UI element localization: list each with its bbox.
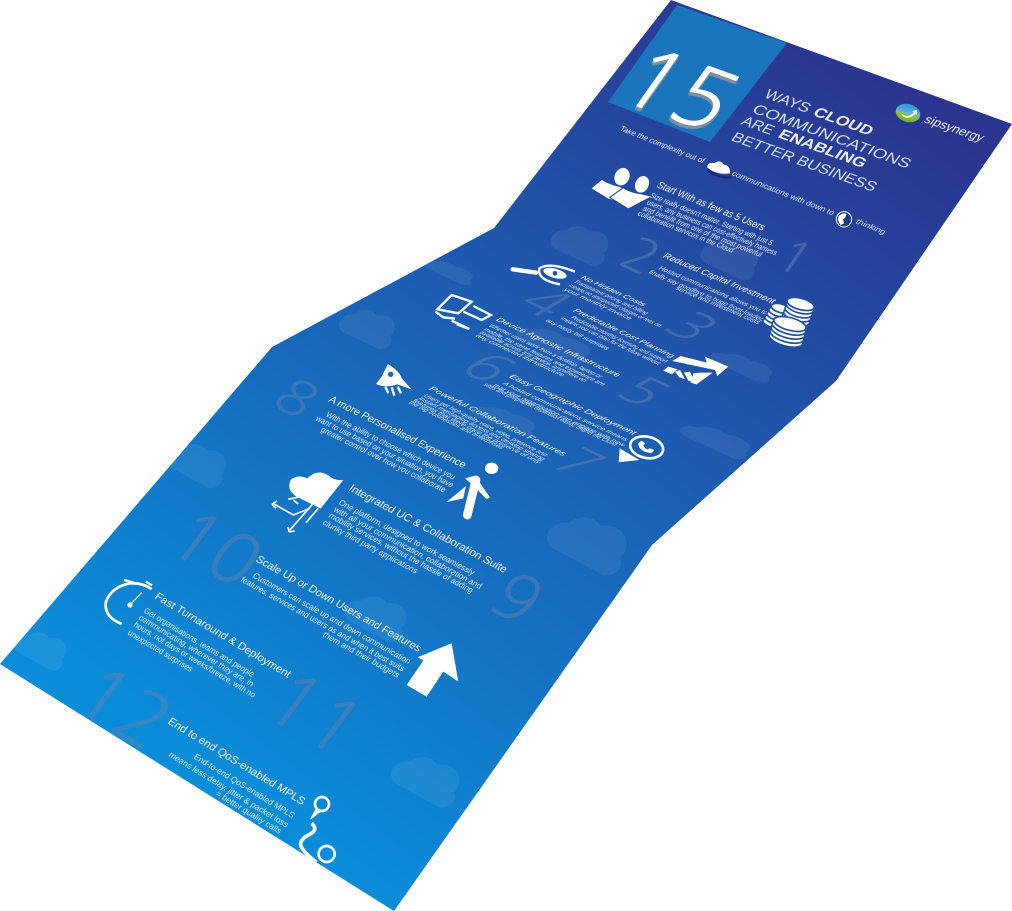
tagline: thinking xyxy=(854,217,888,236)
item: Powerful Collaboration Features: instant messaging access and desktop sharing xyxy=(416,396,548,462)
tagline: Take the complexity out of xyxy=(618,124,708,165)
item: Start With as few as 5 Users: and benefit from one of the most powerful xyxy=(641,204,764,259)
numerals: 6 xyxy=(450,347,525,388)
title text: ARE xyxy=(738,114,778,138)
item: Integrated UC & Collaboration Suite xyxy=(272,472,510,595)
title text: BETTER BUSINESS xyxy=(728,130,881,195)
item: Easy Geographic Deployment: A hosted communications service means xyxy=(500,381,631,442)
item: Fast Turnaround & Deployment: hours, not days or weeks/breeze, with no xyxy=(132,620,258,700)
icon: location pin with phone xyxy=(619,433,665,462)
item: Powerful Collaboration Features: Users get high-quality voice, video, presence and xyxy=(421,393,550,457)
icon: route pins xyxy=(301,797,335,862)
item: Start With as few as 5 Users: collaboration services in the Cloud xyxy=(636,209,736,254)
item: Integrated UC & Collaboration Suite: with all your communication, collaboration and xyxy=(331,504,485,591)
item: Easy Geographic Deployment: sites and geographic expansion easily, only in the Cloud xyxy=(481,382,620,447)
numerals: 9 xyxy=(479,564,554,634)
icon: walking person xyxy=(447,463,498,515)
item: Device Agnostic Infrastructure: available across any device, anywhere on xyxy=(477,330,590,383)
item: No Hidden Costs xyxy=(513,266,665,328)
item: A more Personalised Experience: A more Personalised Experience xyxy=(326,395,468,471)
item: No Hidden Costs: No Hidden Costs xyxy=(578,275,649,307)
item: Device Agnostic Infrastructure: Whether users work from a desktop, laptop or xyxy=(486,323,605,379)
item: Predictable Cost Planning: Predictable monthly licensing and support xyxy=(568,315,671,363)
item: Start With as few as 5 Users: Size really doesn't matter. Starting with just 5 xyxy=(648,191,775,247)
icon: globe xyxy=(836,212,852,227)
numerals: 2 xyxy=(612,230,669,283)
numerals xyxy=(61,230,820,767)
title block: 15 box xyxy=(603,5,787,147)
numerals: 11 xyxy=(252,660,377,767)
item: Integrated UC & Collaboration Suite: mobility services, without the hassle of adding xyxy=(327,511,476,595)
item: End to end QoS-enabled MPLS: means less delay, jitter & packet loss xyxy=(167,750,291,829)
item: Predictable Cost Planning: Predictable Cost Planning xyxy=(570,308,678,359)
item: Start With as few as 5 Users xyxy=(592,165,779,259)
item: Integrated UC & Collaboration Suite: One platform, designed to work seamlessly xyxy=(337,498,478,577)
title block: 15 box: 15 xyxy=(603,39,753,147)
icon: rising chart xyxy=(663,356,728,384)
icon: coins xyxy=(762,295,816,350)
item: Reduced Capital Investment: finally say goodbye to huge front-loaded xyxy=(647,269,767,323)
item: Scale Up or Down Users and Features: Scale Up or Down Users and Features xyxy=(253,554,424,655)
item: No Hidden Costs: Transparent pricing and billing xyxy=(571,279,651,316)
item: Reduced Capital Investment: Reduced Capital Investment xyxy=(660,252,779,306)
item: Powerful Collaboration Features xyxy=(376,364,570,465)
item: Predictable Cost Planning xyxy=(543,308,728,384)
item: Device Agnostic Infrastructure: Device Agnostic Infrastructure xyxy=(493,317,624,378)
icon: stopwatch xyxy=(106,580,152,624)
icon: devices xyxy=(435,295,491,329)
item: Easy Geographic Deployment: that your organisation can engage with new xyxy=(490,383,629,448)
item: Fast Turnaround & Deployment: communicating, wherever they are, in xyxy=(137,613,256,688)
item: Fast Turnaround & Deployment xyxy=(106,580,293,700)
item: Scale Up or Down Users and Features: features, services and users as and when it best suits xyxy=(239,575,407,673)
logo: sipsynergy: sipsynergy xyxy=(921,112,988,144)
item: Integrated UC & Collaboration Suite: clunky third party applications xyxy=(321,518,420,575)
item: Reduced Capital Investment: Hosted communications allows you to xyxy=(657,265,771,316)
icon: cloud xyxy=(707,161,732,178)
title block: 15 box: 15 xyxy=(604,36,754,144)
icon: magnifier eye xyxy=(513,266,575,284)
numerals: 8 xyxy=(264,371,328,426)
item: Start With as few as 5 Users: users, any business can cost-effectively harness xyxy=(645,198,779,257)
item: Powerful Collaboration Features: the big businesses and enterprises xyxy=(406,400,507,450)
item: A more Personalised Experience: With the ability to choose which device you xyxy=(324,410,458,481)
numerals: 5 xyxy=(605,371,680,412)
item: Easy Geographic Deployment: Easy Geographic Deployment xyxy=(506,374,640,436)
item: Scale Up or Down Users and Features: Customers can scale up and down communication xyxy=(251,571,413,666)
title text: WAYS xyxy=(761,87,815,116)
icon: up arrow xyxy=(407,643,458,697)
item: Integrated UC & Collaboration Suite: Integrated UC & Collaboration Suite xyxy=(346,483,510,576)
title text: COMMUNICATIONS xyxy=(749,102,915,172)
numerals: 7 xyxy=(540,442,615,483)
item: Reduced Capital Investment: service and investment costs xyxy=(674,285,763,325)
item: Scale Up or Down Users and Features xyxy=(239,554,458,697)
icon: people xyxy=(592,165,652,208)
title text xyxy=(728,87,915,195)
icon: rocket xyxy=(376,364,412,396)
item: End to end QoS-enabled MPLS: End to end QoS-enabled MPLS xyxy=(165,716,307,808)
item: End to end QoS-enabled MPLS: End-to-end QoS-enabled MPLS xyxy=(192,752,297,820)
item: Fast Turnaround & Deployment: Fast Turnaround & Deployment xyxy=(152,591,293,680)
numerals: 12 xyxy=(61,654,186,761)
numerals: 10 xyxy=(155,500,275,598)
item: End to end QoS-enabled MPLS xyxy=(165,716,335,862)
item: Powerful Collaboration Features: Powerful Collaboration Features xyxy=(426,386,570,457)
item: Device Agnostic Infrastructure xyxy=(435,295,624,387)
item: A more Personalised Experience: greater control over how you collaborate xyxy=(319,425,449,494)
item: Predictable Cost Planning: means you can plan for the future without xyxy=(558,316,663,366)
item: No Hidden Costs: means no unexpected charges or fees on xyxy=(566,283,665,328)
item: A more Personalised Experience: want to use based on your situation, you have xyxy=(313,413,456,489)
numerals: 4 xyxy=(508,282,583,323)
item: Fast Turnaround & Deployment: Get organisations, teams and people xyxy=(142,606,257,679)
item: Reduced Capital Investment xyxy=(647,252,816,350)
background clouds xyxy=(10,217,782,811)
item: Device Agnostic Infrastructure: any connected infrastructure xyxy=(473,333,568,377)
item: No Hidden Costs: your monthly invoice xyxy=(561,287,635,321)
item: Scale Up or Down Users and Features: them and their budgets xyxy=(321,630,402,679)
icon: cloud with arrows xyxy=(272,472,343,532)
numerals: 1 xyxy=(768,232,820,283)
tagline xyxy=(618,124,888,236)
title text: CLOUD xyxy=(810,105,877,139)
item: A more Personalised Experience xyxy=(313,395,498,515)
item: End to end QoS-enabled MPLS: = better quality calls xyxy=(214,789,284,836)
item: Powerful Collaboration Features: features that were once the preserve of only xyxy=(410,398,544,465)
title text: ENABLING xyxy=(775,127,870,171)
item: Predictable Cost Planning: any nasty bill surprises xyxy=(543,318,612,351)
tagline: communications with down to xyxy=(730,169,837,217)
item: Device Agnostic Infrastructure: mobile, the same features and experience are xyxy=(481,327,608,387)
item: Start With as few as 5 Users: Start With as few as 5 Users xyxy=(654,180,768,233)
logo: sipsynergy xyxy=(894,101,988,144)
numerals: 3 xyxy=(654,306,729,347)
item: Fast Turnaround & Deployment: unexpected surprises xyxy=(126,628,195,674)
